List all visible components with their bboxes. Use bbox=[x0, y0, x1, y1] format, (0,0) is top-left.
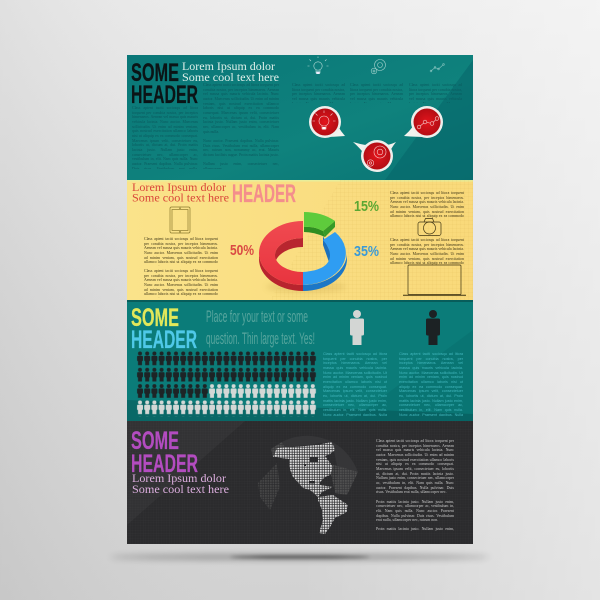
callout pin: gears bbox=[353, 140, 396, 172]
panel: dark globe section bbox=[127, 421, 473, 544]
text block: middle column bbox=[203, 83, 279, 169]
callout pin: bulb bbox=[309, 106, 345, 138]
subheading: Lorem Ipsum dolor bbox=[132, 182, 226, 194]
heading: some header: HEADER bbox=[131, 326, 197, 354]
subheading: Some cool text here bbox=[132, 192, 229, 204]
segment: green 15% bbox=[304, 212, 335, 237]
icon: gears outline bbox=[371, 60, 386, 74]
segment: blue 35% bbox=[303, 232, 347, 291]
panel: teal people section bbox=[127, 300, 473, 421]
subheading: Lorem Ipsum dolor bbox=[182, 61, 275, 73]
icon: laptop bbox=[403, 265, 466, 295]
pictogram chart: people bbox=[137, 352, 317, 417]
question text: Place for your text or some bbox=[206, 307, 308, 326]
globe map bbox=[258, 436, 358, 534]
heading: some header: SOME bbox=[131, 304, 179, 332]
icon: camera bbox=[418, 218, 441, 236]
heading: some header bbox=[131, 59, 198, 109]
text block: globe text: Proin mattis lacinia justo. Nullam justo enim, consectetuer nec, ullamcorper ac, vestibulum in, elit. Nam quis nulla. Nunc auctor. Praesent dapibus. Nulla pulvinar. Duis risus. Vestibulum erat nulla, ullamcorper nec, rutrum non. bbox=[376, 500, 454, 522]
icon: white person bbox=[350, 310, 364, 345]
question text bbox=[206, 307, 315, 348]
text block: middle column: Class aptent taciti sociosqu ad litora torquent per conubia nostra, per inceptos himenaeos. Aenean vel massa quis mauris vehicula lacinia. Nunc auctor. Maecenas sollicitudin. Ut enim ad minim veniam, quis nostrud exercitation ullamco laboris nisi ut aliquip ex ea commodo consequat. Maecenas ipsum velit, consectetuer eu, lobortis ut, dictum at, dui. Proin mattis lacinia justo. Nullam justo enim, consectetuer nec, ullamcorper ac, vestibulum in, elit. Nam quis nulla. bbox=[203, 83, 279, 134]
icon: bulb outline bbox=[308, 56, 328, 74]
text block: globe text: Class aptent taciti sociosqu ad litora torquent per conubia nostra, per inceptos himenaeos. Aenean vel massa quis mauris vehicula lacinia. Nunc auctor. Maecenas sollicitudin. Ut enim ad minim veniam, quis nostrud exercitation ullamco laboris nisi ut aliquip ex ea commodo consequat. Maecenas ipsum velit, consectetuer eu, lobortis ut, dictum at, dui. Proin mattis lacinia justo. Nullam justo enim, consectetuer nec, ullamcorper ac, vestibulum in, elit. Nam quis nulla. Nunc auctor. Praesent dapibus. Nulla pulvinar. Duis risus. Vestibulum erat nulla, ullamcorper nec. bbox=[376, 439, 454, 494]
heading: some header bbox=[131, 304, 197, 354]
icon: black person bbox=[426, 310, 440, 345]
label: 50%: 50% bbox=[230, 242, 254, 259]
heading: some header: SOME bbox=[131, 427, 179, 455]
text block: three small columns bbox=[292, 83, 462, 103]
americas bbox=[273, 442, 348, 534]
icon: line chart outline bbox=[430, 64, 444, 72]
text block: middle column: Nunc auctor. Praesent dapibus. Nulla pulvinar. Duis risus. Vestibulum erat nulla, ullamcorper nec, rutrum non, nonummy ac, erat. Mauris dictum facilisis augue. Proin mattis lacinia justo. bbox=[203, 139, 279, 157]
subheading: Lorem Ipsum dolor bbox=[132, 473, 226, 485]
label: 15%: 15% bbox=[354, 198, 379, 215]
subheading: Some cool text here bbox=[132, 484, 229, 496]
heading: header: HEADER bbox=[232, 180, 296, 208]
globe crescent bbox=[271, 436, 358, 495]
heading: some header: HEADER bbox=[131, 450, 198, 478]
subheading: Some cool text here bbox=[182, 72, 279, 84]
subheading bbox=[132, 473, 229, 496]
panel: yellow section bbox=[127, 180, 473, 300]
lakes and gulf bbox=[304, 457, 318, 484]
subheading bbox=[132, 182, 229, 204]
floor shadow bbox=[110, 554, 490, 560]
heading: some header: HEADER bbox=[131, 81, 198, 109]
panel: top teal section bbox=[127, 55, 473, 180]
icon: tablet bbox=[170, 207, 190, 233]
label: 35%: 35% bbox=[354, 243, 379, 260]
panel: teal people section: question. Thin large text. Yes! bbox=[206, 329, 315, 348]
heading: some header: SOME bbox=[131, 59, 179, 87]
text block: globe text bbox=[376, 439, 454, 531]
segment: red 50% bbox=[259, 221, 303, 291]
callout pin: chart bbox=[404, 106, 443, 138]
dim landmasses bbox=[258, 442, 358, 510]
heading: some header bbox=[131, 427, 198, 478]
subheading bbox=[182, 61, 279, 84]
donut shadow bbox=[266, 281, 346, 293]
donut chart bbox=[259, 212, 347, 293]
